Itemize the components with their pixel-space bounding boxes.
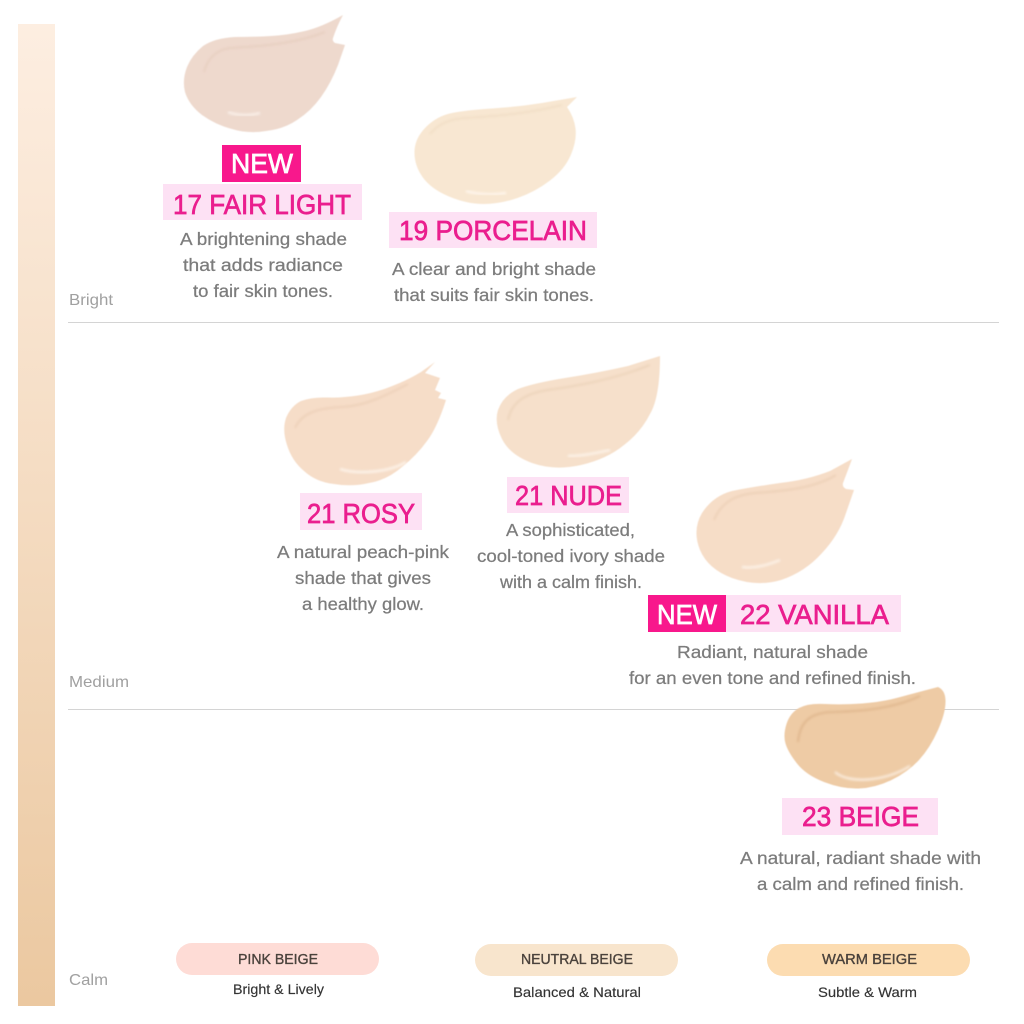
legend: Warm Beige: Subtle & Warm — [818, 984, 917, 1000]
legend: Warm Beige: WARM BEIGE — [822, 951, 917, 968]
name: 23 BEIGE — [782, 798, 938, 835]
tone gradient bar — [18, 24, 55, 1006]
shade: 19 Porcelain — [389, 97, 597, 305]
description: to fair skin tones. — [193, 281, 333, 301]
name tag: NEW 22 VANILLA: NEW — [657, 599, 718, 630]
description: A clear and bright shade — [392, 259, 596, 279]
description — [180, 229, 347, 301]
legend: Neutral Beige — [475, 944, 678, 1000]
name: 21 ROSY: 21 ROSY — [307, 498, 415, 529]
legend: Neutral Beige: Balanced & Natural — [513, 984, 641, 1000]
shade: 22 Vanilla — [629, 459, 916, 688]
label: Calm: Calm — [69, 972, 108, 989]
description: a healthy glow. — [302, 594, 424, 614]
description — [740, 848, 981, 894]
name: 19 PORCELAIN: 19 PORCELAIN — [399, 215, 587, 246]
label: Medium: Medium — [69, 674, 129, 691]
description — [392, 259, 596, 305]
badge: NEW — [222, 145, 301, 182]
divider: bright and medium — [68, 322, 999, 323]
description: A sophisticated, — [506, 520, 635, 540]
name: 17 FAIR LIGHT: 17 FAIR LIGHT — [173, 189, 351, 220]
swatch: 23 Beige — [784, 687, 946, 789]
badge: NEW: NEW — [231, 148, 294, 179]
legend: Neutral Beige: NEUTRAL BEIGE — [521, 951, 633, 968]
name tag: NEW 22 VANILLA — [648, 595, 901, 632]
description: cool-toned ivory shade — [477, 546, 665, 566]
legend: Warm Beige — [767, 944, 970, 1000]
swatch: 22 Vanilla — [696, 459, 854, 583]
description: with a calm finish. — [499, 572, 642, 592]
description: shade that gives — [295, 568, 431, 588]
description — [629, 642, 916, 688]
shade: 17 Fair Light — [163, 15, 362, 301]
description: that suits fair skin tones. — [394, 285, 594, 305]
swatch: 17 Fair Light — [184, 15, 345, 132]
description: A natural peach-pink — [277, 542, 449, 562]
legend: Pink Beige: PINK BEIGE — [238, 951, 318, 968]
swatch: 21 Rosy — [284, 362, 446, 485]
name: 23 BEIGE: 23 BEIGE — [802, 801, 919, 832]
swatch: 19 Porcelain — [414, 97, 577, 204]
description: a calm and refined finish. — [757, 874, 964, 894]
divider: medium and calm — [68, 709, 999, 710]
description: A natural, radiant shade with — [740, 848, 981, 868]
description: that adds radiance — [183, 255, 343, 275]
description — [277, 542, 449, 614]
legend: Pink Beige: Bright & Lively — [233, 981, 324, 997]
legend: Pink Beige — [176, 943, 379, 997]
description: A brightening shade — [180, 229, 347, 249]
name tag: NEW 22 VANILLA: 22 VANILLA — [740, 599, 889, 630]
swatch: 21 Nude — [497, 356, 660, 468]
description: Radiant, natural shade — [677, 642, 868, 662]
description: for an even tone and refined finish. — [629, 668, 916, 688]
shade: 21 Rosy — [277, 362, 449, 614]
name: 21 NUDE: 21 NUDE — [515, 480, 622, 511]
description — [477, 520, 665, 592]
shade: 21 Nude — [477, 356, 665, 592]
shade: 23 Beige — [740, 687, 981, 894]
label: Bright: Bright — [69, 292, 114, 309]
